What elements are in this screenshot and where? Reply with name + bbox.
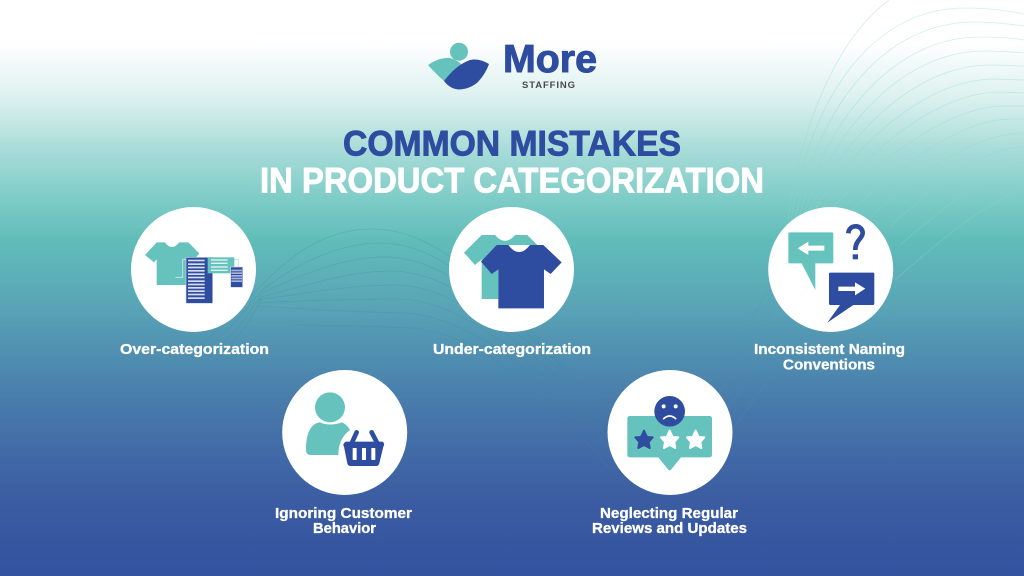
panel: ignoring customer behavior	[275, 370, 412, 537]
label	[592, 506, 747, 537]
logo	[428, 38, 597, 91]
label: Ignoring Customer	[275, 506, 412, 522]
title	[260, 124, 764, 200]
logo mark	[428, 43, 489, 90]
icon: two t-shirts	[464, 235, 562, 308]
label: Under-categorization	[433, 342, 591, 358]
panel: neglecting regular reviews and updates	[592, 370, 747, 537]
icon: shirt with size charts	[145, 242, 243, 303]
label: Conventions	[783, 358, 875, 374]
label	[754, 342, 905, 374]
panel: over-categorization	[120, 207, 269, 358]
icon: speech bubbles with arrows and question mark	[788, 226, 874, 323]
label: Reviews and Updates	[592, 521, 747, 537]
circle	[449, 207, 574, 332]
label: Inconsistent Naming	[754, 342, 905, 358]
label: Neglecting Regular	[600, 506, 738, 522]
label	[275, 506, 412, 537]
logo subtitle: STAFFING	[522, 80, 575, 91]
icon: customer with basket	[306, 392, 384, 466]
title line 2: IN PRODUCT CATEGORIZATION	[260, 162, 764, 200]
panel: under-categorization	[433, 207, 591, 358]
circle	[282, 370, 407, 495]
circle	[608, 370, 732, 495]
title line 1: COMMON MISTAKES	[343, 124, 681, 164]
icon: review bubble with sad face and stars	[627, 396, 712, 470]
label: Behavior	[313, 521, 376, 537]
label: Over-categorization	[120, 342, 269, 358]
panel: inconsistent naming conventions	[754, 207, 905, 374]
logo wordmark: More	[503, 38, 597, 81]
circle	[768, 207, 893, 332]
circle	[131, 207, 256, 332]
